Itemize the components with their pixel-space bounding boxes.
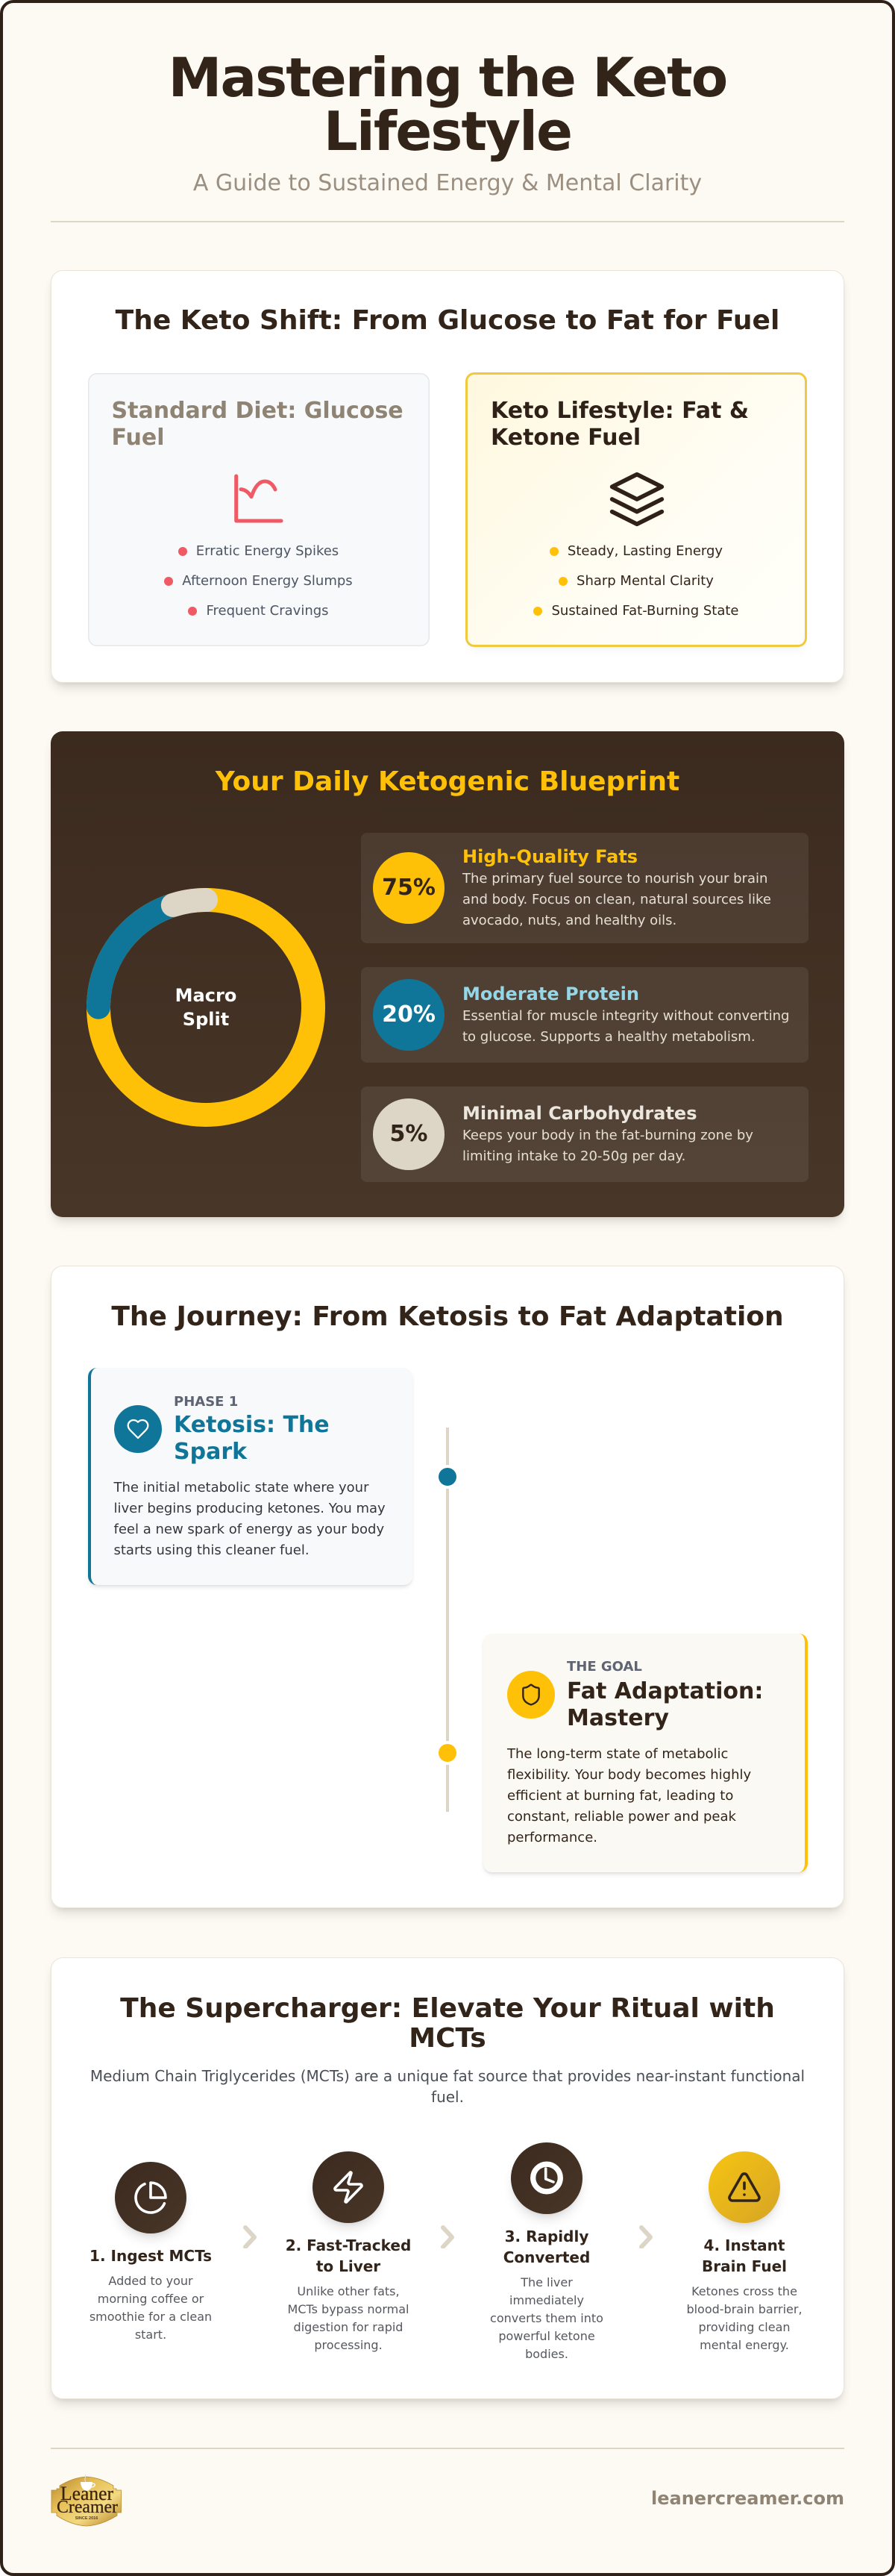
intro text: Medium Chain Triglycerides (MCTs) are a unique fat source that provides near-instant functional [90, 2067, 805, 2085]
step 2 description [288, 2284, 409, 2352]
step 4 heading [702, 2236, 787, 2275]
phase description: starts using this cleaner fuel. [113, 1542, 310, 1558]
fats description [462, 871, 771, 928]
step 2 description: digestion for rapid [294, 2320, 403, 2334]
goal description [507, 1746, 751, 1845]
icon: lightning bolt [313, 2151, 384, 2223]
step 3 description: converts them into [490, 2311, 603, 2325]
carbohydrates description: Keeps your body in the fat-burning zone by [462, 1128, 753, 1143]
goal description: efficient at burning fat, leading to [507, 1788, 733, 1804]
benefit: afternoon energy slumps: Afternoon Energy Slumps [182, 573, 353, 589]
carbohydrates description: limiting intake to 20-50g per day. [462, 1148, 685, 1164]
heading: journey: The Journey: From Ketosis to Fat Adaptation [111, 1301, 784, 1332]
step 1 [90, 2162, 212, 2342]
step 4 description [686, 2284, 803, 2352]
subtitle: A Guide to Sustained Energy & Mental Clarity [193, 170, 702, 196]
timeline marker: phase 1 [439, 1468, 456, 1486]
fats description: The primary fuel source to nourish your brain [462, 871, 767, 887]
step 3 [490, 2142, 603, 2361]
goal description: flexibility. Your body becomes highly [507, 1767, 751, 1783]
card: phase 1 ketosis [88, 1368, 412, 1585]
badge: 5% [373, 1098, 445, 1170]
timeline marker: goal [439, 1744, 456, 1762]
step 4 description: Ketones cross the [691, 2284, 797, 2298]
step 2 description: MCTs bypass normal [288, 2302, 409, 2316]
macro row: protein [361, 967, 808, 1063]
benefit: steady energy: Steady, Lasting Energy [568, 543, 723, 559]
step 4 description: mental energy. [700, 2338, 789, 2352]
heading: blueprint: Your Daily Ketogenic Blueprint [216, 766, 679, 797]
panel: the journey [51, 1266, 844, 1908]
step 2 description: processing. [314, 2338, 383, 2352]
protein description [462, 1008, 789, 1045]
step 3 description: The liver [521, 2275, 573, 2289]
arrow: step 3 to 4 [639, 2225, 653, 2248]
carbohydrates description [462, 1128, 753, 1164]
badge: 75%: 75% [382, 875, 436, 901]
phase heading: Ketosis: The [174, 1412, 330, 1438]
icon: heart [113, 1405, 161, 1453]
fats heading: High-Quality Fats [462, 846, 638, 867]
phase description: liver begins producing ketones. You may [113, 1501, 386, 1516]
step 4 description: providing clean [698, 2320, 791, 2334]
phase description: feel a new spark of energy as your body [113, 1522, 384, 1537]
logo: leaner creamer badge: Creamer [57, 2498, 118, 2517]
step 3 description: bodies. [525, 2347, 568, 2361]
benefit: mental clarity: Sharp Mental Clarity [577, 573, 714, 589]
icon: shield [507, 1671, 555, 1719]
step 2 heading: to Liver [316, 2257, 380, 2275]
card heading: standard diet: Standard Diet: Glucose [112, 398, 403, 424]
step 4 heading: Brain Fuel [702, 2257, 787, 2275]
icon: clock [511, 2142, 582, 2214]
icon: warning triangle [709, 2151, 780, 2223]
protein heading: Moderate Protein [462, 984, 639, 1004]
title [169, 46, 726, 163]
phase heading [174, 1412, 330, 1465]
heading: keto shift: The Keto Shift: From Glucose to Fat for Fuel [116, 305, 779, 336]
arrow: step 1 to 2 [243, 2225, 257, 2248]
step 2 [286, 2151, 411, 2352]
badge: 5%: 5% [390, 1121, 427, 1147]
card: keto lifestyle [465, 372, 807, 647]
goal heading [567, 1678, 763, 1731]
fats description: avocado, nuts, and healthy oils. [462, 913, 676, 928]
fats description: and body. Focus on clean, natural sources like [462, 892, 771, 907]
step 1 description: morning coffee or [98, 2292, 204, 2306]
badge: 75% [373, 852, 445, 924]
step 4 heading: 4. Instant [704, 2236, 785, 2254]
card: goal fat adaptation [483, 1634, 807, 1872]
donut centre label: Split [183, 1009, 229, 1030]
step 1 description: smoothie for a clean [90, 2310, 212, 2324]
website: leanercreamer.com [651, 2488, 844, 2509]
goal description: performance. [507, 1830, 597, 1845]
panel: the supercharger [51, 1957, 844, 2399]
goal description: The long-term state of metabolic [507, 1746, 728, 1762]
donut centre label [175, 985, 236, 1030]
timeline line [446, 1428, 449, 1812]
intro text [90, 2067, 805, 2106]
step 4 description: blood-brain barrier, [686, 2302, 803, 2316]
benefit: frequent cravings: Frequent Cravings [206, 603, 329, 619]
badge: 20% [373, 979, 445, 1051]
card heading: standard diet [112, 398, 403, 451]
donut chart: macro split [87, 888, 325, 1127]
icon: erratic line chart [234, 475, 283, 522]
step 1 description: start. [135, 2328, 166, 2342]
footer [51, 2448, 844, 2527]
step 3 description: immediately [509, 2293, 584, 2307]
card heading: keto lifestyle [491, 398, 749, 451]
carbohydrates heading: Minimal Carbohydrates [462, 1103, 697, 1124]
card heading: standard diet: Fuel [112, 425, 164, 451]
badge: 20%: 20% [382, 1001, 436, 1028]
card heading: keto lifestyle: Keto Lifestyle: Fat & [491, 398, 749, 424]
logo: leaner creamer badge [51, 2475, 122, 2527]
heading: supercharger [120, 1993, 775, 2054]
step 1 description [90, 2274, 212, 2342]
step 2 heading [286, 2236, 411, 2275]
step 3 heading: 3. Rapidly [505, 2228, 588, 2245]
icon: layers [610, 472, 664, 527]
phase label: PHASE 1 [174, 1394, 238, 1410]
protein description: Essential for muscle integrity without converting [462, 1008, 789, 1024]
phase description [113, 1480, 386, 1558]
step 1 heading: 1. Ingest MCTs [90, 2247, 212, 2265]
step 3 description: powerful ketone [498, 2329, 595, 2343]
benefit: fat burning: Sustained Fat-Burning State [551, 603, 739, 619]
step 3 heading: Converted [503, 2248, 590, 2266]
logo: leaner creamer badge: Leaner [60, 2483, 113, 2504]
logo: leaner creamer badge: SINCE 2016 [75, 2516, 98, 2521]
macro row: carbohydrates [361, 1087, 808, 1182]
step 3 description [490, 2275, 603, 2361]
goal heading: Fat Adaptation: [567, 1678, 763, 1704]
step 2 description: Unlike other fats, [297, 2284, 400, 2298]
title: Lifestyle [324, 100, 571, 163]
goal label: THE GOAL [567, 1659, 642, 1675]
heading: supercharger: The Supercharger: Elevate Your Ritual with [120, 1993, 775, 2024]
step 4 [686, 2151, 803, 2352]
step 3 heading [503, 2228, 590, 2266]
macro row: fats [361, 833, 808, 943]
step 2 heading: 2. Fast-Tracked [286, 2236, 411, 2254]
panel: the keto shift [51, 270, 844, 683]
title: Mastering the Keto [169, 46, 726, 109]
heading: supercharger: MCTs [409, 2023, 486, 2054]
card heading: keto lifestyle: Ketone Fuel [491, 425, 641, 451]
header [169, 46, 726, 196]
donut centre label: Macro [175, 985, 236, 1006]
protein description: to glucose. Supports a healthy metabolism. [462, 1029, 756, 1045]
card: standard diet [88, 373, 430, 646]
benefit: erratic energy spikes: Erratic Energy Spikes [196, 543, 339, 559]
step 1 description: Added to your [108, 2274, 193, 2288]
panel: daily ketogenic blueprint [51, 731, 844, 1217]
phase heading: Spark [174, 1439, 247, 1465]
goal heading: Mastery [567, 1705, 669, 1731]
phase description: The initial metabolic state where your [113, 1480, 368, 1495]
arrow: step 2 to 3 [441, 2225, 454, 2248]
intro text: fuel. [431, 2088, 464, 2106]
icon: pie chart [115, 2162, 186, 2233]
goal description: constant, reliable power and peak [507, 1809, 736, 1825]
